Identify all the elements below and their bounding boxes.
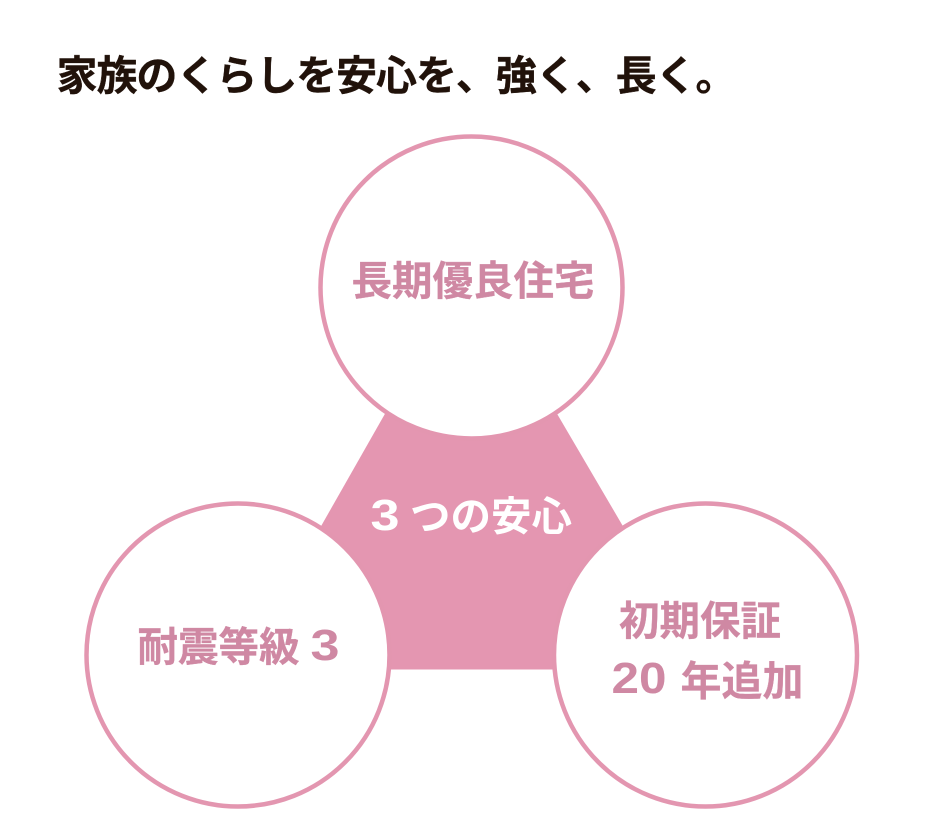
circle: 耐震等級3 (86, 504, 390, 806)
center label: つの安心 (410, 494, 572, 540)
circle: 初期保証20年追加: 年追加 (680, 658, 804, 704)
circle: 初期保証20年追加: 20 (612, 654, 666, 703)
circle: 耐震等級3: 耐震等級 (138, 624, 300, 670)
center label: 3 (370, 491, 400, 540)
circle: 初期保証20年追加 (554, 504, 857, 806)
circle: 耐震等級3: 3 (310, 621, 340, 670)
center triangle: 3つの安心 (320, 412, 624, 670)
circle: 長期優良住宅: 長期優良住宅 (352, 258, 594, 304)
circle: 初期保証20年追加: 初期保証 (619, 598, 781, 644)
title: 家族のくらしを安心を、強く、長く。 (56, 53, 736, 99)
circle: 長期優良住宅 (320, 136, 622, 438)
